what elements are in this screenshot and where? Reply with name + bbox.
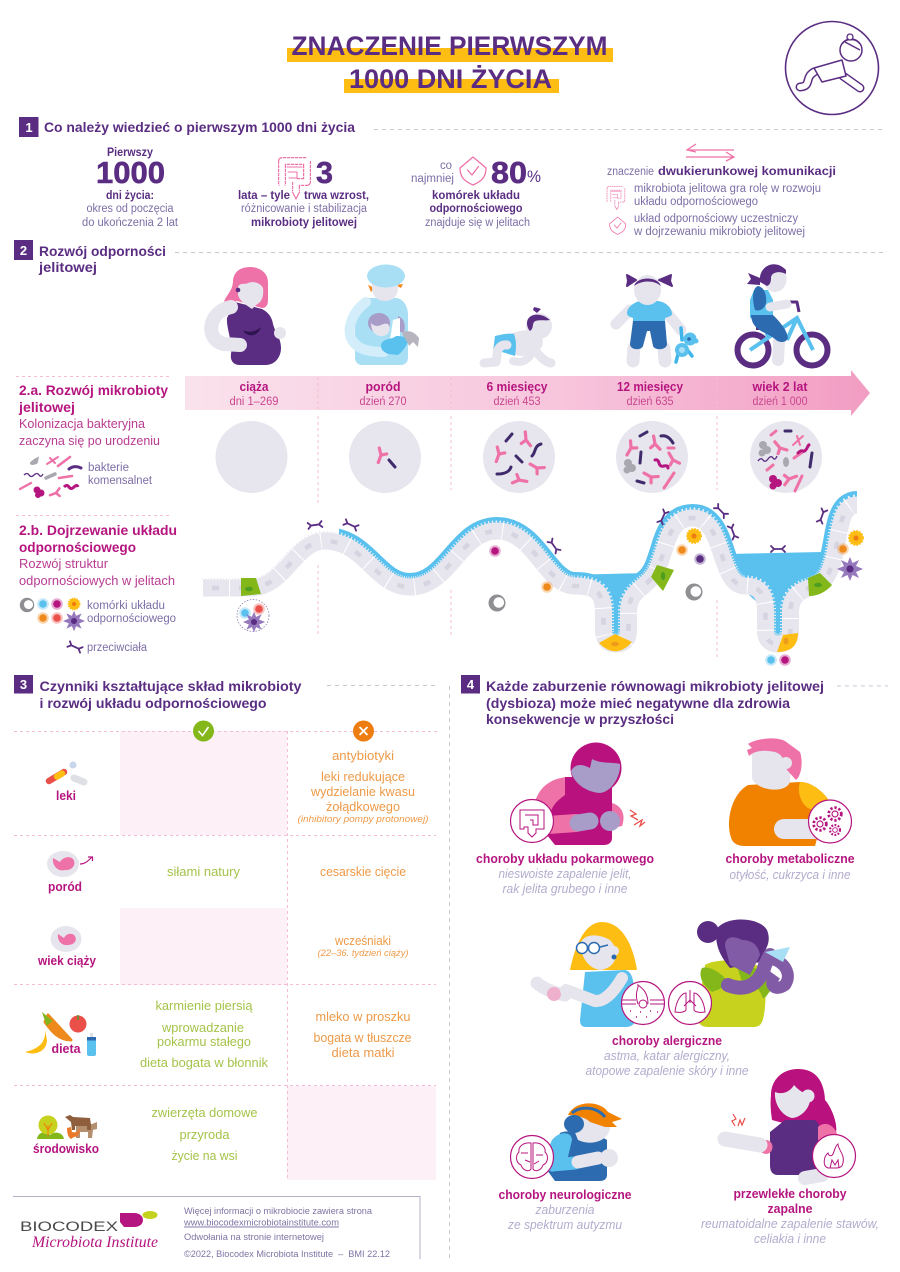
logo: Microbiota Institute [31,1234,158,1251]
antibodies [308,504,827,553]
figure: metabolic disease [726,738,855,882]
green and yellow specialised cells [241,565,832,652]
text block: 2.a microbiota: Kolonizacja bakteryjna [19,417,145,431]
row: wiek ciąży [37,926,409,968]
section 3 heading [14,675,438,711]
text block: 2.b immune system: komórki układu [87,600,165,612]
caption [701,1187,879,1246]
text block: 2.b immune system: odpornościowego [87,613,176,625]
row: dieta: mleko w proszku [316,1010,411,1024]
row: poród: siłami natury [167,865,241,879]
legend icons: commensal bacteria [20,456,81,499]
title: ZNACZENIE PIERWSZYM [292,31,608,61]
row: środowisko: zwierzęta domowe [152,1106,258,1120]
row: leki: leki redukujące [321,770,405,784]
stage: 12 months: dzień 635 [626,396,674,408]
immune cluster [237,600,269,632]
caption: atopowe zapalenie skóry i inne [586,1064,749,1078]
row: leki: antybiotyki [332,749,394,763]
text block: 2.b immune system: 2.b. Dojrzewanie układu [19,522,177,538]
fact: bidirectional communication: mikrobiota jelitowa gra rolę w rozwoju [634,183,821,195]
row: dieta: wprowadzanie [161,1021,244,1035]
stage: 2 years [752,380,808,408]
figure: allergic diseases [537,919,790,1078]
text block: 2.b immune system: Rozwój struktur [19,557,108,571]
figure: neurological disease [498,1103,632,1232]
fact: 1000 days: Pierwszy [107,147,154,159]
circle: 12 months [616,421,688,493]
text block: 2.b immune system [16,516,177,654]
icon: intestine badge [510,800,554,842]
section 2 heading [14,240,886,275]
text block: 2.a microbiota: zaczyna się po urodzeniu [19,434,160,448]
stage: 6 months [486,380,548,408]
title [287,31,613,94]
section 4 heading: (dysbioza) może mieć negatywne dla zdrowia [486,695,790,711]
row: wiek ciąży: wiek ciąży [37,954,96,968]
stage: ciąża [230,380,278,408]
fact: 80 percent: % [527,167,541,186]
stage: 6 months: dzień 453 [494,396,540,408]
caption: astma, katar alergiczny, [604,1049,730,1063]
icon: two-way arrows [686,144,734,161]
fact: 3 years: trwa wzrost, [304,190,369,202]
fact: 1000 days [82,147,179,229]
icon: gears badge [808,800,852,843]
circle: birth [349,421,421,493]
woman sneezing [697,919,790,1027]
row: dieta: dieta bogata w błonnik [140,1056,269,1070]
section 3 heading: 3 [20,677,27,692]
row: poród [47,851,406,894]
stage: 12 months [617,380,683,408]
row: poród: cesarskie cięcie [320,865,406,879]
section 1 heading [19,117,886,137]
legend icon: antibody [67,641,83,653]
fact: 80 percent: znajduje się w jelitach [425,217,530,229]
stage: poród [360,380,406,408]
figure: digestive disease [476,742,654,896]
caption: przewlekłe choroby [734,1187,847,1201]
row: dieta: bogata w tłuszcze [314,1031,412,1045]
icon: lungs badge [668,982,712,1024]
section 3 heading: i rozwój układu odpornościowego [40,695,266,711]
fact: 80 percent: odpornościowego [430,203,522,215]
figure: doctor with newborn [350,264,419,365]
immune cells [488,529,863,666]
fact: 3 years [238,155,369,229]
caption: zapalne [768,1202,813,1216]
row: wiek ciąży: wcześniaki [334,934,391,948]
title: 1000 DNI ŻYCIA [349,64,552,94]
fact: bidirectional communication: układu odpornościowego [634,196,758,208]
row: leki: (inhibitory pompy protonowej) [298,814,428,825]
footer text: Odwołania na stronie internetowej [184,1232,324,1243]
fact: bidirectional communication: układ odpornościowy uczestniczy [634,213,798,225]
section 1 heading: 1 [25,120,33,135]
logo: BIOCODEX [20,1219,118,1234]
figure: pregnant woman [211,267,286,365]
row: leki: żołądkowego [326,800,400,814]
text block: 2.a microbiota: bakterie [88,462,129,474]
stage: ciąża: dni 1–269 [230,396,278,408]
row: dieta [25,999,412,1070]
section 4 heading: konsekwencje w przyszłości [486,711,674,727]
fact: 80 percent: najmniej [411,173,454,185]
text block: 2.b immune system: przeciwciała [87,642,148,654]
fact: 1000 days: dni życia: [106,190,154,202]
fact: 3 years: mikrobioty jelitowej [251,217,357,229]
icon: intestine [279,161,307,199]
row: środowisko: przyroda [180,1128,230,1142]
section 2 heading: Rozwój odporności [39,243,166,259]
caption: reumatoidalne zapalenie stawów, [701,1217,879,1231]
row: środowisko: życie na wsi [172,1149,238,1163]
gut epithelium diagram [202,504,863,666]
stage: poród: poród [366,380,400,394]
fact: bidirectional communication [607,144,836,238]
legend icons: immune cells [20,598,85,631]
figure: crawling baby [484,307,552,363]
fact: 80 percent: komórek układu [432,190,520,202]
icon: check [193,720,214,742]
fact: 3 years: 3 [316,155,333,190]
caption [586,1034,749,1078]
icon: skin badge [622,982,664,1024]
fact: 3 years: lata – tyle [238,190,290,202]
circle: pregnancy, empty [216,421,288,493]
caption: rak jelita grubego i inne [502,882,628,896]
row: leki [49,749,428,825]
icon: small shield [610,217,626,234]
text block: 2.b immune system: odpornościowych w jelitach [19,574,175,588]
row: wiek ciąży: (22–36. tydzień ciąży) [318,948,408,959]
caption: choroby metaboliczne [726,852,855,866]
fact: 80 percent [411,155,541,229]
caption: choroby układu pokarmowego [476,852,654,866]
icon: shield [460,157,486,185]
row: środowisko: środowisko [33,1142,99,1156]
section 2 heading: jelitowej [38,259,97,275]
circle: 2 years [750,421,822,493]
caption [476,852,654,896]
timeline arrow [185,370,870,416]
row: leki: wydzielanie kwasu [310,785,415,799]
text block: 2.a microbiota: komensalnet [88,475,153,487]
caption: choroby alergiczne [612,1034,722,1048]
row: środowisko [33,1106,258,1163]
fact: 1000 days: 1000 [96,155,165,190]
row: dieta: dieta matki [332,1046,394,1060]
fact: 3 years: różnicowanie i stabilizacja [241,203,368,215]
row: dieta: dieta [52,1042,82,1056]
icon: flame badge [812,1134,856,1178]
row: dieta: karmienie piersią [156,999,253,1013]
section 4 heading: Każde zaburzenie równowagi mikrobioty jelitowej [486,678,824,694]
footer text: Więcej informacji o mikrobiocie zawiera strona [184,1206,373,1217]
fact: bidirectional communication: znaczenie [607,166,654,178]
fact: 1000 days: do ukończenia 2 lat [82,217,179,229]
stage: 12 months: 12 miesięcy [617,380,683,394]
caption: nieswoiste zapalenie jelit, [498,867,632,881]
fact: 80 percent: 80 [491,155,527,190]
section 3 heading: Czynniki kształtujące skład mikrobioty [40,678,302,694]
caption: celiakia i inne [754,1232,826,1246]
icon: brain badge [510,1136,554,1178]
footer text: www.biocodexmicrobiotainstitute.com [183,1218,339,1228]
figure: child on balance bike [738,264,828,366]
row: leki: leki [56,789,76,803]
microbiota circles [216,421,822,493]
stage: poród: dzień 270 [360,396,406,408]
figure: toddler with teddy [616,275,698,362]
caption: ze spektrum autyzmu [507,1218,622,1232]
footer [13,1196,420,1260]
section 4 heading [461,675,888,727]
section 4 heading: 4 [467,677,475,692]
stage: 6 months: 6 miesięcy [486,380,548,394]
icon: crawling baby badge [786,22,878,114]
caption [726,852,855,882]
text block: 2.a microbiota [16,376,170,499]
caption: zaburzenia [535,1203,595,1217]
caption: otyłość, cukrzyca i inne [730,868,851,882]
footer text [183,1206,390,1260]
section 2 heading: 2 [20,243,27,258]
figure: chronic inflammatory disease [701,1069,879,1246]
fact: bidirectional communication: w dojrzewaniu mikrobioty jelitowej [633,226,805,238]
row: dieta: pokarmu stałego [157,1035,251,1049]
fact: bidirectional communication: dwukierunkowej komunikacji [658,166,836,178]
fact: 1000 days: okres od poczęcia [86,203,174,215]
child with glasses [537,922,637,1027]
text block: 2.a microbiota: jelitowej [18,399,75,415]
text block: 2.a microbiota: 2.a. Rozwój mikrobioty [19,382,168,398]
stage: 2 years: wiek 2 lat [752,380,808,394]
row: poród: poród [48,880,82,894]
footer text: ©2022, Biocodex Microbiota Institute – BMI 22.12 [184,1249,390,1260]
stage: ciąża: ciąża [240,380,269,394]
text block: 2.b immune system: odpornościowego [19,539,136,555]
logo [20,1211,158,1251]
factors table [14,720,438,1180]
fact: 80 percent: co [440,160,452,172]
section 1 heading: Co należy wiedzieć o pierwszym 1000 dni życia [44,119,355,135]
icon: small intestine [607,188,623,210]
circle: 6 months [483,421,555,493]
stage: 2 years: dzień 1 000 [752,396,808,408]
icon: cross [353,720,374,742]
caption: choroby neurologiczne [498,1188,632,1202]
caption [498,1188,632,1232]
